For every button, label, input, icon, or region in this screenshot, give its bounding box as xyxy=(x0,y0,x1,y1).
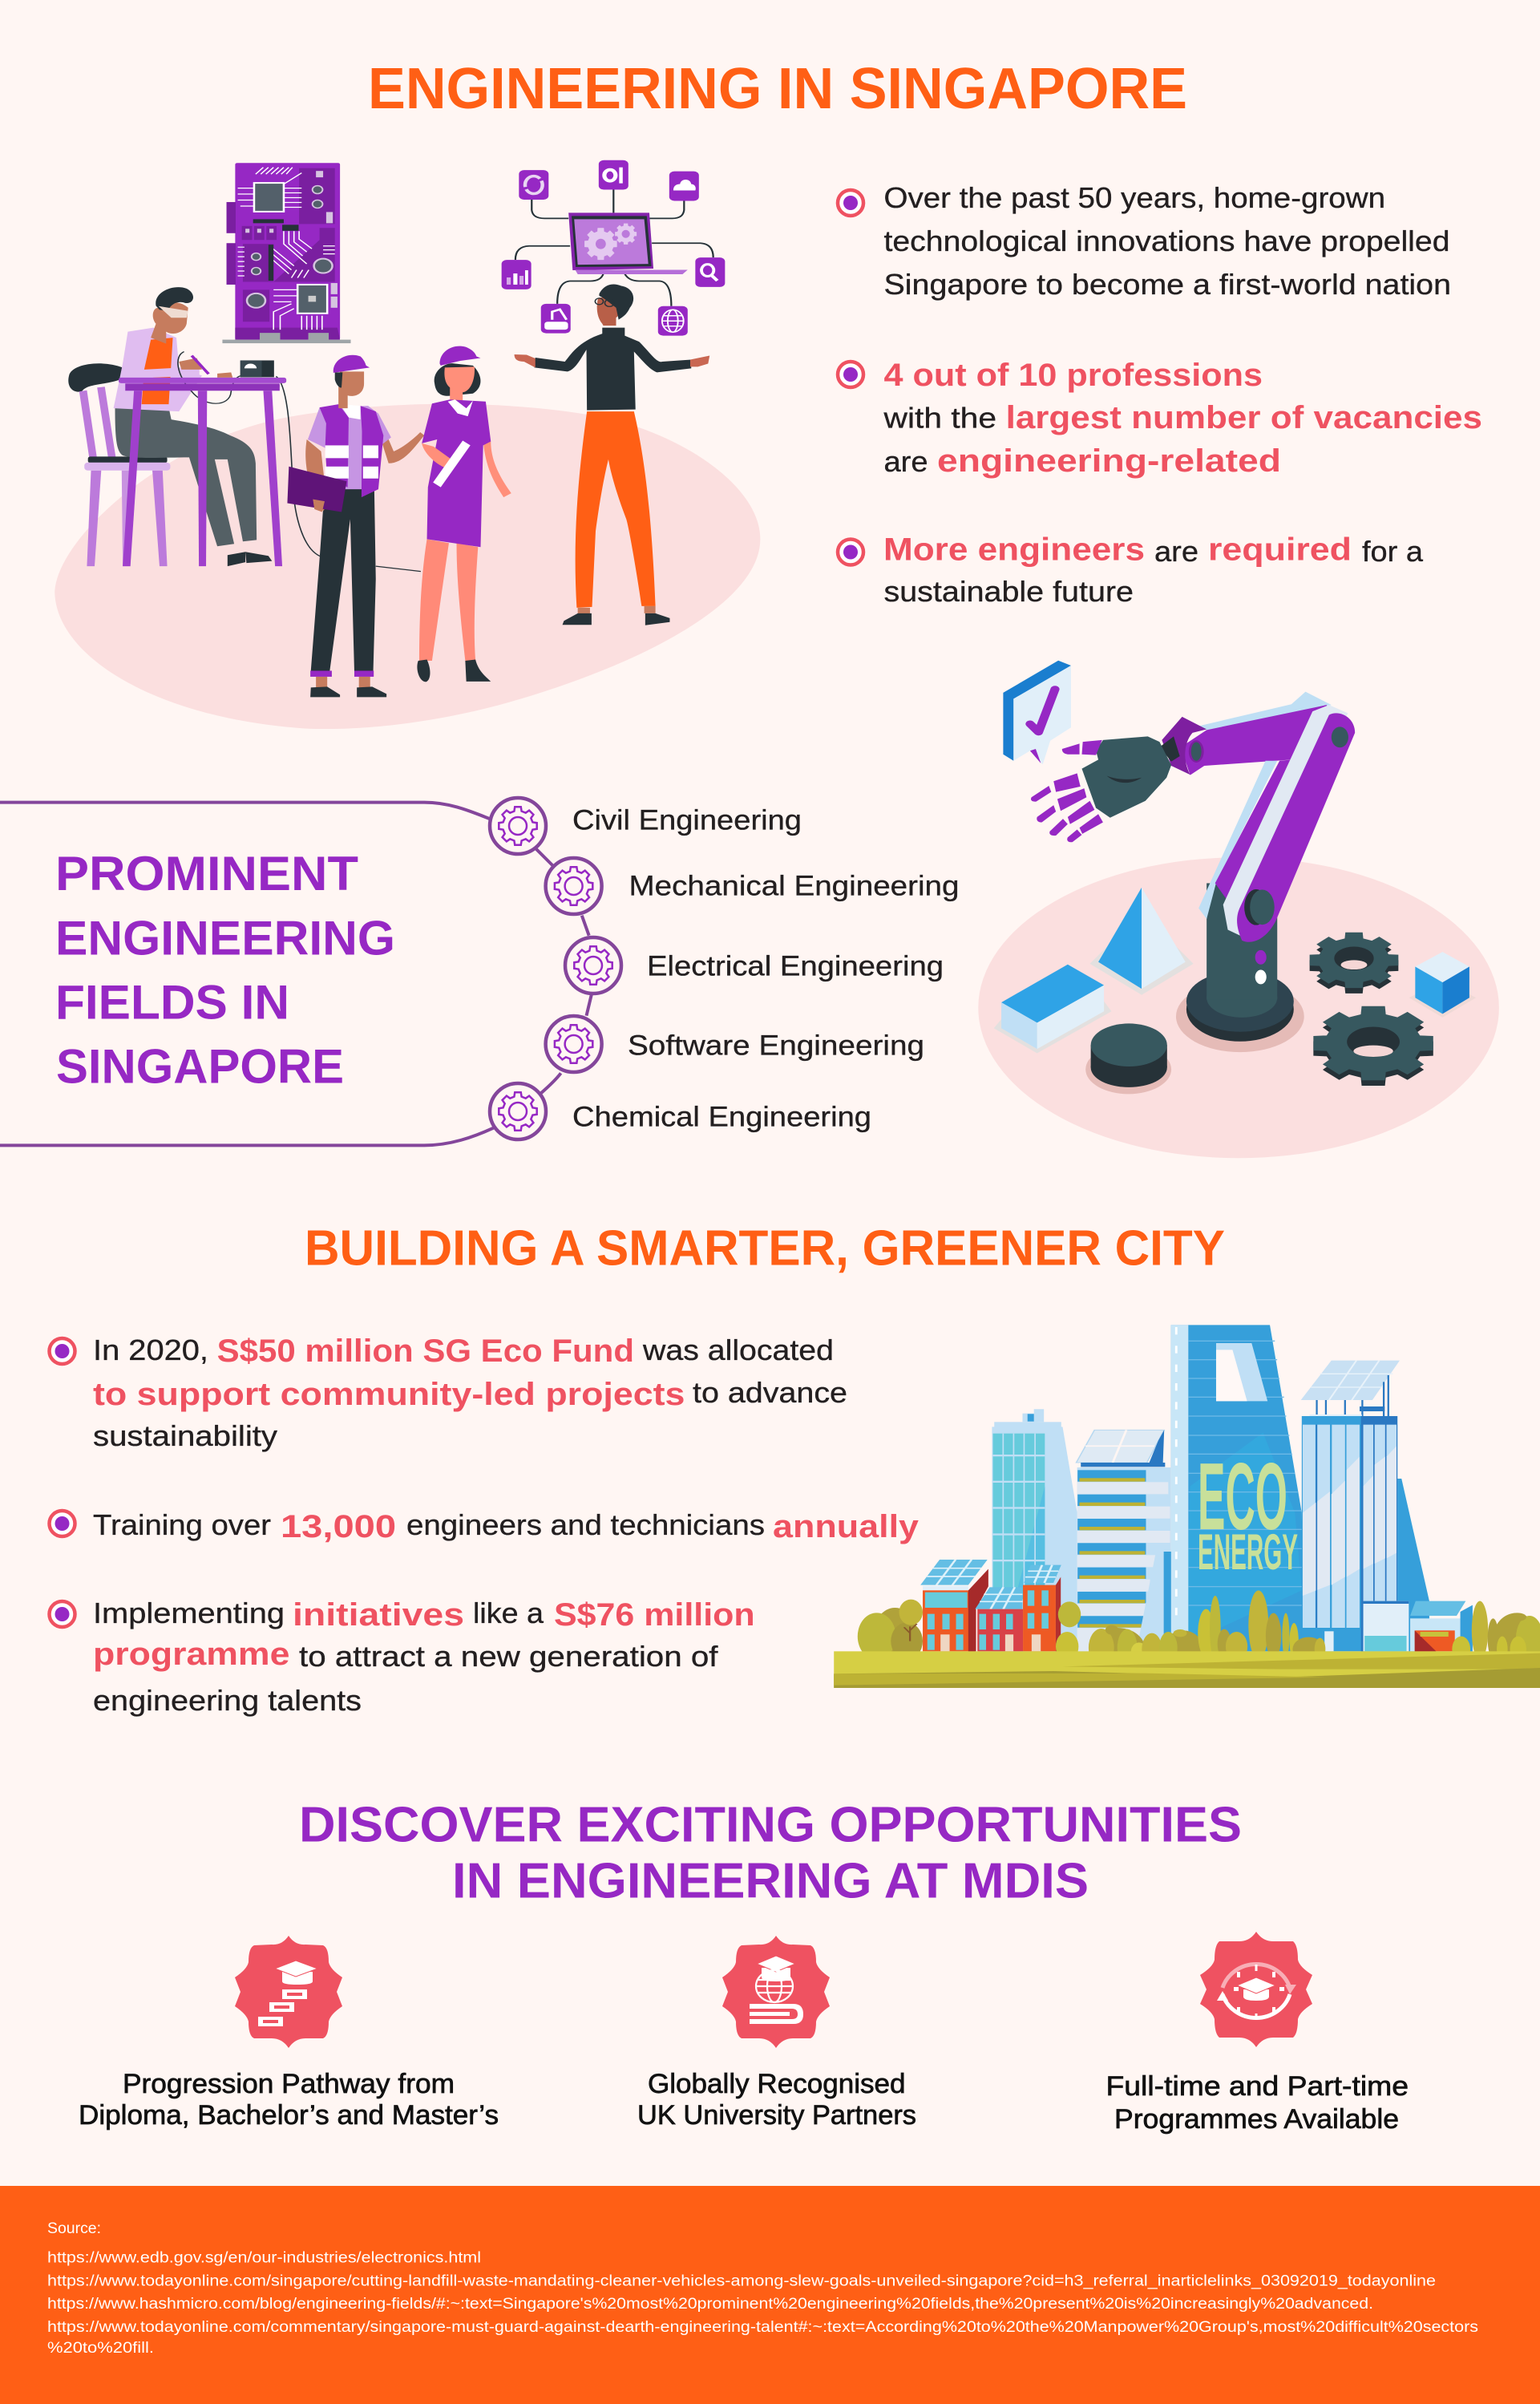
heading: prominent engineering fields: PROMINENT xyxy=(55,847,358,900)
heading: prominent engineering fields: ENGINEERING xyxy=(55,912,395,965)
illustration: robot arm xyxy=(978,661,1499,1158)
field: electrical engineering xyxy=(565,937,944,994)
bullet point: eco fund: S$50 million SG Eco Fund xyxy=(217,1334,634,1369)
ground xyxy=(834,1651,1540,1688)
laptop network diagram xyxy=(502,160,725,336)
bullet point 3: required xyxy=(1208,532,1352,568)
cube xyxy=(1409,952,1476,1018)
bullet point: training engineers: annually xyxy=(773,1509,920,1544)
bullet point: initiatives: Implementing xyxy=(93,1597,285,1629)
bullet point 2: engineering-related xyxy=(937,443,1281,479)
back tower xyxy=(1397,1479,1429,1651)
right tower with solar panel xyxy=(1301,1361,1409,1651)
opportunity: university partners: UK University Partners xyxy=(637,2100,916,2131)
footer: sources: https://www.todayonline.com/singapore/cutting-landfill-waste-mandating-cleaner-vehicles-among-slew-goals-unveiled-singapore?cid=h3_referral_inarticlelinks_03092019_todayonline xyxy=(47,2273,1436,2290)
bullet point: initiatives: initiatives xyxy=(293,1597,464,1633)
bullet point: training engineers xyxy=(50,1508,920,1544)
bullet list: greener city initiatives xyxy=(50,1334,920,1717)
woman engineer with blueprint xyxy=(417,346,511,682)
bullet point 1: Over the past 50 years, home-grown xyxy=(883,181,1385,214)
pyramid xyxy=(1089,888,1194,995)
bullet point 2: largest number of vacancies xyxy=(1006,400,1482,435)
opportunity: university partners xyxy=(637,1936,916,2131)
icon: clock and cap badge xyxy=(1200,1932,1312,2047)
field: mechanical engineering xyxy=(546,858,959,914)
field: electrical engineering: Electrical Engineering xyxy=(647,951,944,981)
footer: sources: Source: xyxy=(47,2220,101,2237)
field: chemical engineering xyxy=(490,1083,871,1139)
icon: globe and book badge xyxy=(722,1936,830,2048)
app icons xyxy=(502,160,725,336)
panel: prominent engineering fields xyxy=(0,798,959,1145)
bullet point: training engineers: 13,000 xyxy=(281,1509,396,1544)
bullet point: eco fund xyxy=(50,1334,847,1452)
heading: discover opportunities xyxy=(299,1798,1242,1909)
footer: sources: https://www.edb.gov.sg/en/our-industries/electronics.html xyxy=(47,2250,481,2267)
bullet point: initiatives: to attract a new generation of xyxy=(299,1640,719,1673)
footer: sources: %20to%20fill. xyxy=(47,2340,154,2357)
robot hand xyxy=(1031,736,1180,842)
field: chemical engineering: Chemical Engineering xyxy=(572,1102,871,1132)
small solar kiosk xyxy=(1410,1601,1473,1651)
bullet point: initiatives xyxy=(50,1597,755,1717)
bullet point 1: Singapore to become a first-world nation xyxy=(883,268,1451,301)
title: ENGINEERING IN SINGAPORE xyxy=(368,57,1187,121)
large gear xyxy=(1313,1006,1433,1086)
icon: stepped pathway badge xyxy=(235,1936,342,2048)
green terrace building xyxy=(1077,1430,1171,1652)
bullet point 2: 4 out of 10 professions xyxy=(883,358,1263,393)
opportunity: progression pathway xyxy=(79,1936,499,2131)
bullet point 2: with the xyxy=(883,401,996,435)
bullet point: eco fund: was allocated xyxy=(642,1334,834,1366)
footer: sources: https://www.hashmicro.com/blog/engineering-fields/#:~:text=Singapore's%20most%20prominent%20engineering%20fields,the%20present%20is%20increasingly%20advanced. xyxy=(47,2296,1373,2313)
field: civil engineering: Civil Engineering xyxy=(572,805,802,836)
heading: prominent engineering fields: FIELDS IN xyxy=(55,976,289,1030)
left glass tower xyxy=(992,1409,1077,1651)
bullet point: training engineers: Training over xyxy=(93,1508,271,1541)
opportunity: study modes: Programmes Available xyxy=(1114,2104,1399,2135)
bullet point: eco fund: In 2020, xyxy=(93,1334,208,1366)
illustration: eco city: ENERGY xyxy=(1198,1524,1298,1580)
bullet point: initiatives: like a xyxy=(473,1597,544,1629)
opportunity: study modes: Full-time and Part-time xyxy=(1106,2071,1409,2102)
seated engineer at desk xyxy=(68,287,286,566)
robot base and column xyxy=(1176,883,1304,1052)
bullet point: initiatives: programme xyxy=(93,1637,289,1672)
heading: prominent engineering fields: SINGAPORE xyxy=(56,1040,344,1094)
bullet point: eco fund: to support community-led projects xyxy=(93,1377,685,1412)
footer: sources: https://www.todayonline.com/commentary/singapore-must-guard-against-dearth-engineering-talent#:~:text=According%20to%20the%20Manpower%20Group's,most%20difficult%20sectors xyxy=(47,2319,1478,2336)
cable xyxy=(276,376,421,572)
field: civil engineering xyxy=(490,798,802,854)
bullet list: why engineering matters xyxy=(838,181,1482,608)
opportunity: study modes xyxy=(1106,1932,1409,2135)
bullet point 1 xyxy=(838,181,1451,301)
circuit board xyxy=(222,163,351,343)
bullet point 3: sustainable future xyxy=(883,575,1134,608)
bullet point: initiatives: S$76 million xyxy=(554,1597,755,1633)
pink background blob xyxy=(55,404,760,729)
cylinder xyxy=(1085,1023,1171,1094)
bracket and connector line xyxy=(0,803,592,1145)
heading: discover opportunities: IN ENGINEERING AT MDIS xyxy=(452,1854,1089,1909)
illustration: engineers at work xyxy=(55,160,760,729)
bullet point 1: technological innovations have propelled xyxy=(883,225,1449,257)
olive trees and bushes xyxy=(858,1590,1540,1668)
opportunity: university partners: Globally Recognised xyxy=(648,2069,906,2099)
heading: prominent engineering fields xyxy=(55,847,395,1094)
robot arm segments xyxy=(1162,692,1355,942)
bullet point: initiatives: engineering talents xyxy=(93,1684,362,1717)
small gear xyxy=(1310,933,1398,994)
heading: building a smarter greener city: BUILDING A SMARTER, GREENER CITY xyxy=(305,1221,1225,1277)
eco energy sign xyxy=(1198,1443,1298,1580)
bullet point: eco fund: sustainability xyxy=(93,1419,277,1452)
field: software engineering xyxy=(546,1016,924,1072)
big eco tower xyxy=(1171,1325,1304,1651)
heading: discover opportunities: DISCOVER EXCITING OPPORTUNITIES xyxy=(299,1798,1242,1853)
bullet point 3: for a xyxy=(1362,535,1424,568)
engineer with vest and folder xyxy=(287,355,424,697)
field: mechanical engineering: Mechanical Engineering xyxy=(629,871,959,901)
bullet point 2: are xyxy=(883,445,928,478)
box xyxy=(994,965,1111,1053)
bullet point: eco fund: to advance xyxy=(693,1376,847,1409)
opportunity: progression pathway: Diploma, Bachelor’s and Master’s xyxy=(79,2100,499,2131)
field: software engineering: Software Engineering xyxy=(628,1030,924,1062)
bullet point 3 xyxy=(838,532,1424,608)
opportunity: progression pathway: Progression Pathway from xyxy=(123,2069,455,2099)
bullet point 3: More engineers xyxy=(883,532,1145,568)
bullet point: training engineers: engineers and technicians xyxy=(406,1508,765,1541)
red brick houses xyxy=(920,1560,1061,1651)
illustration: eco city: ECO xyxy=(1198,1443,1287,1550)
check mark sign xyxy=(1003,661,1071,764)
footer: sources xyxy=(0,2186,1540,2404)
illustration: eco city xyxy=(834,1325,1540,1688)
presenter in turtleneck and orange trousers xyxy=(515,284,709,625)
bullet point 2 xyxy=(838,358,1482,479)
bullet point 3: are xyxy=(1154,535,1198,568)
